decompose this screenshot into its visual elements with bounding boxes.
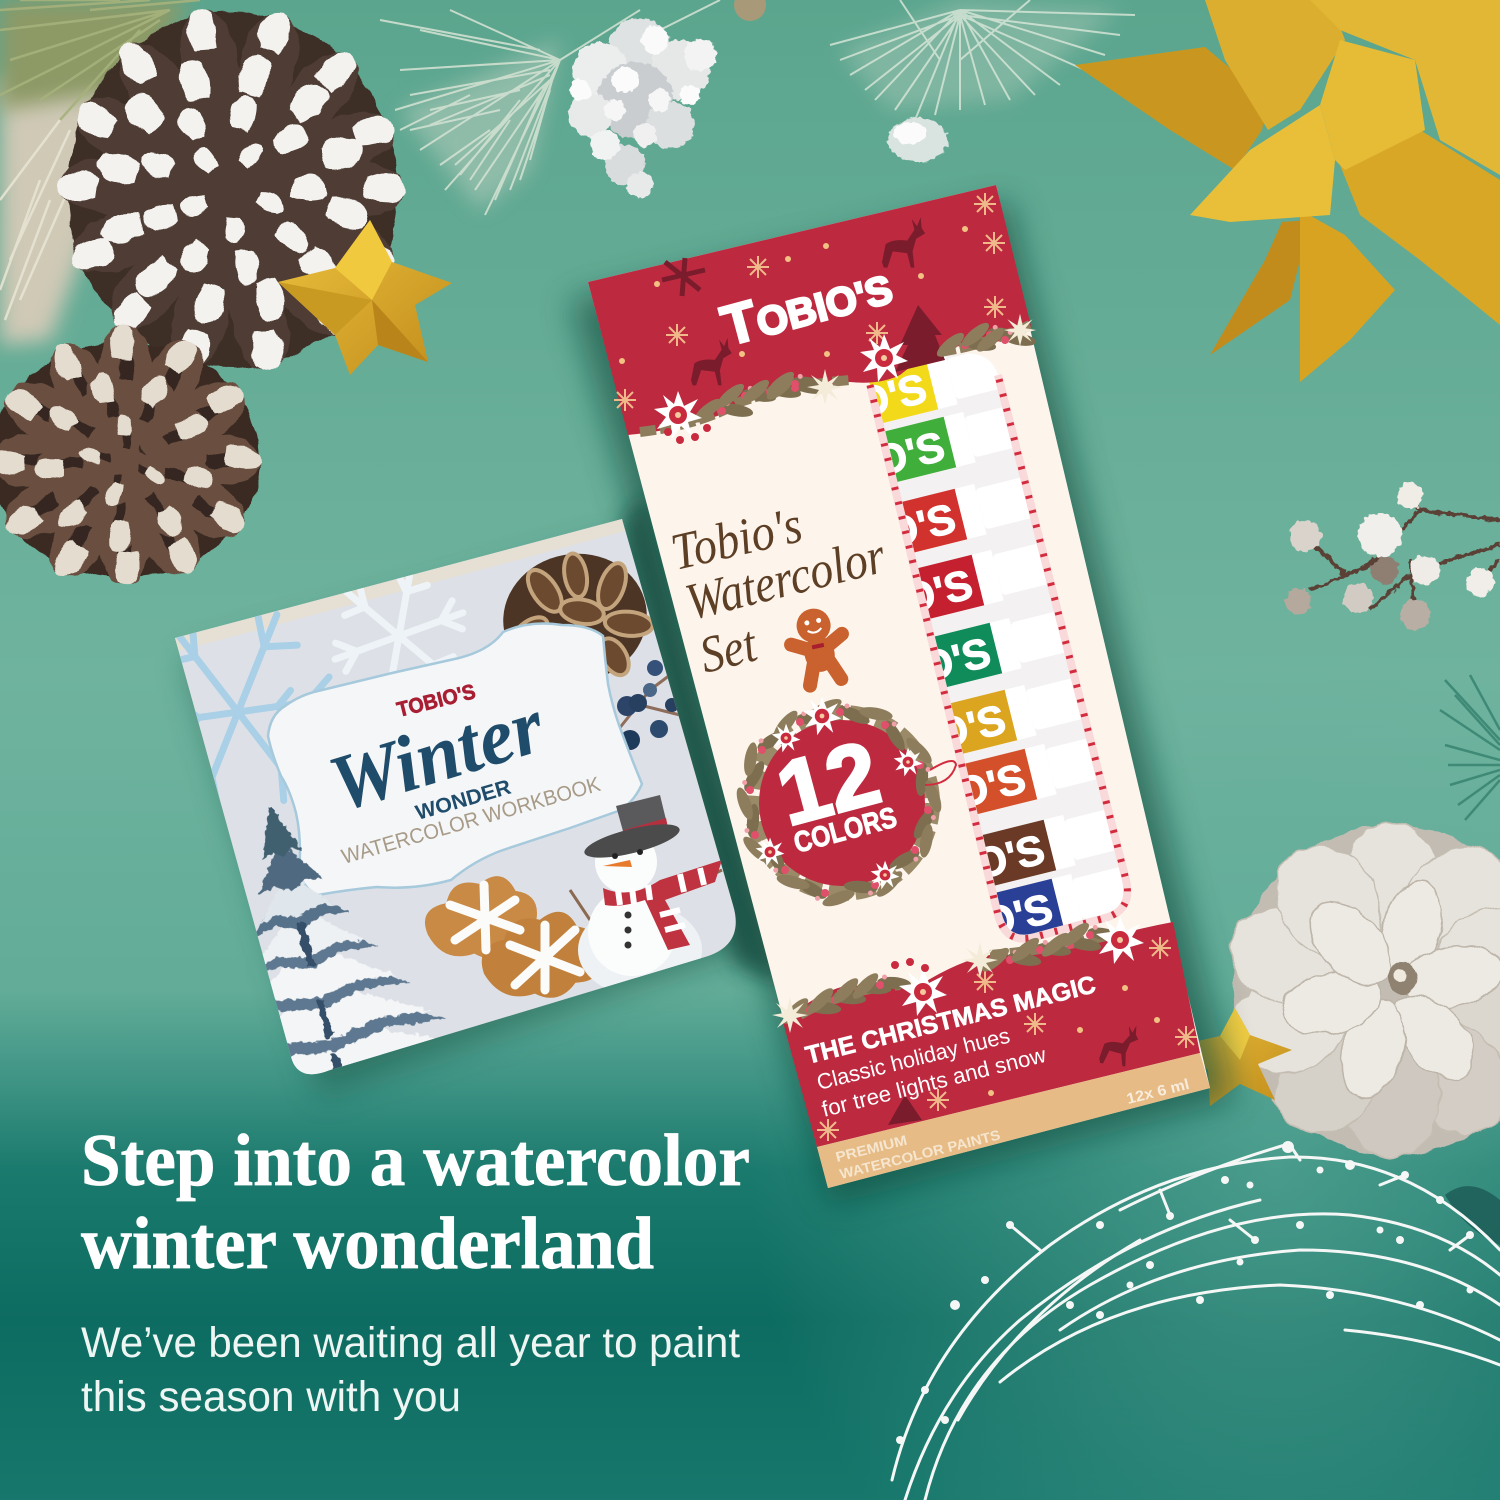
white twig with buds	[1285, 483, 1500, 630]
premium line 2: WATERCOLOR PAINTS	[838, 1126, 1002, 1182]
large pine cone	[57, 4, 406, 376]
tube green: O'S	[869, 422, 949, 485]
badge: 12 colors	[728, 693, 956, 912]
subheading line 2: this season with you	[81, 1373, 461, 1421]
plaque	[268, 624, 642, 895]
small gold star	[1180, 1008, 1292, 1106]
snowy berry cluster	[568, 18, 716, 198]
tube amber: O'S	[930, 695, 1010, 758]
box shadow	[570, 200, 1235, 1205]
tube dark green: O'S	[915, 628, 995, 691]
gap shadow between book and box	[622, 490, 785, 985]
snowy fir tree	[256, 807, 446, 1074]
tube blue	[996, 868, 1124, 935]
tube window background	[869, 353, 1127, 939]
box copy line 1: Classic holiday hues	[814, 1023, 1012, 1095]
title line 2: Watercolor	[680, 527, 892, 632]
snowflake: blue	[176, 611, 332, 804]
icon: gingerbread man	[785, 604, 851, 688]
tube orange: O'S	[950, 754, 1030, 817]
top red panel	[588, 185, 1032, 435]
heading line 1: Step into a watercolor	[81, 1120, 750, 1202]
bottom tan band	[817, 1053, 1210, 1188]
number 12: 12	[767, 723, 890, 845]
title line 1: Tobio's	[666, 496, 807, 582]
label colors: COLORS	[791, 802, 900, 860]
cookies	[424, 876, 592, 998]
book spine	[175, 519, 625, 651]
tubes	[869, 354, 1124, 935]
heading line 2: winter wonderland	[81, 1203, 654, 1285]
book subtitle wonder: WONDER	[413, 776, 514, 825]
dark pine at right edge	[1440, 675, 1500, 820]
tube green	[885, 408, 1012, 482]
large gold flower	[1075, 0, 1500, 382]
box copy line 2: for tree lights and snow	[819, 1042, 1048, 1122]
pine needles top left	[0, 0, 200, 320]
panel: watercolor set box	[588, 185, 1210, 1188]
book shadow	[185, 535, 755, 1095]
box cream body	[588, 185, 1210, 1188]
tube brown	[982, 810, 1114, 886]
snowman	[570, 795, 722, 996]
bud at top edge	[734, 0, 766, 21]
book title script: Winter	[320, 681, 555, 829]
book subtitle workbook: WATERCOLOR WORKBOOK	[339, 773, 603, 869]
top garland	[640, 311, 1040, 444]
pine needles top centre	[380, 0, 720, 215]
tube crimson: O'S	[897, 560, 977, 623]
snowflake: white	[332, 574, 466, 675]
logo small: TOBIO'S	[395, 680, 478, 722]
tube red: O'S	[880, 494, 960, 557]
pine cone	[503, 552, 654, 678]
pine needles top right	[830, 0, 1135, 120]
tube red	[902, 478, 1030, 552]
tube yellow: O'S	[851, 364, 931, 427]
beige wood at top left	[0, 0, 190, 345]
tube amber	[951, 678, 1081, 754]
navy berries	[617, 660, 679, 750]
tube dark green	[934, 612, 1064, 687]
heading on box: THE CHRISTMAS MAGIC	[803, 971, 1099, 1070]
tube yellow	[869, 354, 998, 423]
small snow ball	[888, 118, 948, 162]
wreath	[728, 693, 956, 912]
tube brown: O'S	[969, 825, 1049, 888]
dark leaf at lower right	[1445, 1186, 1500, 1245]
bottom red panel	[783, 922, 1200, 1147]
striped window border	[870, 375, 1127, 939]
book illustrations	[176, 552, 723, 1074]
white branch wreath	[892, 1141, 1500, 1500]
title line 3: Set	[694, 615, 764, 685]
book cover	[175, 519, 736, 1074]
wreath band	[752, 713, 932, 893]
premium line 1: PREMIUM	[834, 1132, 909, 1165]
tube crimson	[918, 544, 1047, 619]
top panel decorations	[614, 193, 1006, 411]
script title	[666, 496, 892, 685]
tube orange	[966, 738, 1096, 814]
white flower	[1217, 822, 1500, 1158]
subheading	[81, 1319, 740, 1421]
volume label: 12x 6 ml	[1125, 1076, 1191, 1108]
bottom garland	[772, 911, 1144, 1036]
main heading	[81, 1120, 750, 1285]
subheading line 1: We’ve been waiting all year to paint	[81, 1319, 740, 1367]
logo: TOBIO'S	[715, 252, 898, 358]
panel: winter wonder workbook	[175, 519, 736, 1074]
bottom panel decorations	[817, 937, 1197, 1141]
tube blue: O'S	[977, 884, 1057, 947]
gold star on cone	[278, 220, 452, 375]
small pine cone	[0, 323, 262, 587]
